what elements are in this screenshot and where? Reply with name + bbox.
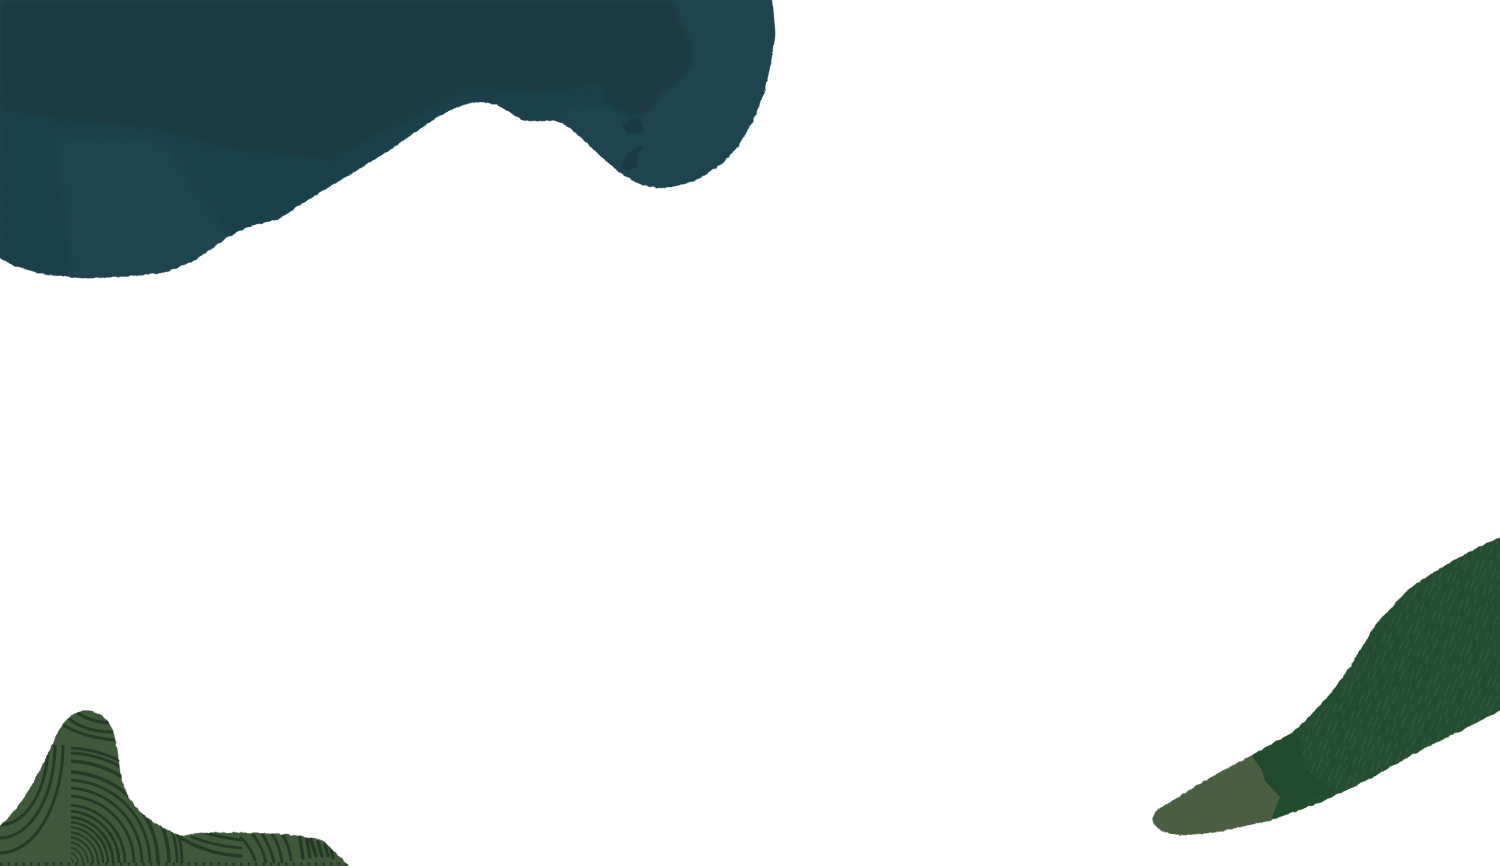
- leaf texture: [1301, 538, 1500, 794]
- shape: green leaf bottom right: [1140, 530, 1500, 840]
- hatch: peak curves: [63, 713, 116, 740]
- mid-tone textured wash: [0, 0, 640, 290]
- shape: green hatched hill bottom left: [0, 700, 360, 866]
- leaf darker band: [1304, 764, 1305, 766]
- hatch: left arcs: [0, 745, 63, 853]
- dark ink spots: [622, 118, 644, 170]
- dark upper wash: [0, 0, 692, 160]
- hatch: concentric arcs: [67, 748, 182, 863]
- shape: teal blob top left: [0, 0, 790, 290]
- hatch: lower right strokes: [178, 833, 333, 862]
- hatch: bottom dashed row: [0, 862, 350, 866]
- leaf olive tip: [1145, 755, 1280, 838]
